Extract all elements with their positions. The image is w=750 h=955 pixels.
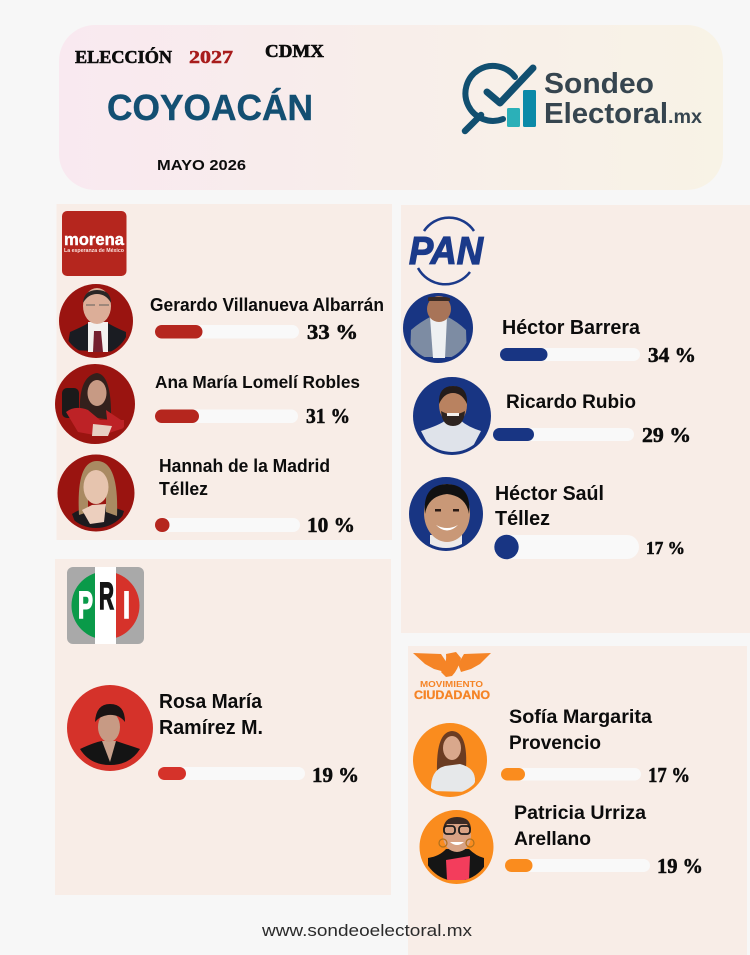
candidate: Héctor Barrera: 34 % [648, 343, 696, 367]
candidate: Hannah de la Madrid Téllez: Hannah de la Madrid [159, 456, 330, 476]
logo: pri: I [123, 585, 130, 627]
candidate: Patricia Urriza Arellano [420, 802, 703, 884]
candidate: Hannah de la Madrid Téllez: Téllez [159, 479, 208, 499]
heading: elección: ELECCIÓN [75, 46, 172, 67]
candidate: Héctor Saúl Téllez: Téllez [495, 508, 550, 530]
candidate: Gerardo Villanueva Albarrán [59, 284, 384, 358]
candidate: Ana María Lomelí Robles [55, 364, 360, 444]
candidate: Rosa María Ramírez M.: Rosa María [159, 691, 263, 713]
logo: pri: R [99, 576, 114, 618]
candidate: Ricardo Rubio: 29 % [642, 423, 691, 447]
candidate: Sofía Margarita Provencio: Sofía Margarita [509, 706, 652, 728]
candidate: Héctor Barrera [403, 293, 696, 367]
logo: morena [62, 211, 126, 276]
candidate: Ana María Lomelí Robles: Ana María Lomelí Robles [155, 372, 360, 392]
panel: pan [401, 205, 750, 633]
candidate: Sofía Margarita Provencio: Provencio [509, 732, 601, 754]
title: coyoacán: COYOACÁN [107, 87, 313, 128]
logo: pan: PAN [409, 230, 484, 273]
candidate: Rosa María Ramírez M.: Ramírez M. [159, 717, 263, 739]
candidate: Héctor Saúl Téllez: 17 % [646, 538, 685, 558]
panel: movimiento ciudadano [408, 646, 747, 955]
candidate: Sofía Margarita Provencio [413, 706, 690, 797]
logo: movimiento ciudadano: MOVIMIENTO [420, 679, 483, 689]
panel: pri [55, 559, 391, 895]
candidate: Gerardo Villanueva Albarrán: 33 % [307, 320, 358, 344]
logo: morena: morena [64, 230, 125, 249]
logo: sondeo electoral: Sondeo [544, 68, 654, 100]
candidate: Ricardo Rubio [413, 377, 691, 455]
candidate: Ana María Lomelí Robles: 31 % [306, 404, 350, 428]
heading: cdmx: CDMX [265, 41, 324, 61]
panel: morena [55, 204, 392, 540]
candidate: Héctor Saúl Téllez: Héctor Saúl [495, 483, 604, 505]
candidate: Héctor Barrera: Héctor Barrera [502, 317, 641, 339]
logo: sondeo electoral: .mx [668, 107, 702, 128]
heading: year: 2027 [189, 47, 233, 67]
candidate: Ricardo Rubio: Ricardo Rubio [506, 391, 636, 413]
logo: sondeo electoral [465, 66, 702, 131]
candidate: Rosa María Ramírez M.: 19 % [312, 763, 359, 787]
candidate: Héctor Saúl Téllez [409, 477, 685, 559]
candidate: Patricia Urriza Arellano: Arellano [514, 828, 591, 850]
candidate: Patricia Urriza Arellano: Patricia Urriza [514, 802, 646, 824]
logo: movimiento ciudadano: CIUDADANO [414, 688, 490, 702]
candidate: Rosa María Ramírez M. [67, 685, 359, 787]
header panel [59, 25, 723, 190]
footer url: www.sondeoelectoral.mx [261, 921, 473, 940]
logo: pan [409, 218, 484, 284]
logo: pri: P [78, 585, 93, 627]
candidate: Patricia Urriza Arellano: 19 % [657, 854, 703, 878]
logo: pri [67, 567, 144, 644]
candidate: Sofía Margarita Provencio: 17 % [648, 763, 690, 787]
candidate: Hannah de la Madrid Téllez [58, 454, 355, 537]
logo: movimiento ciudadano [413, 652, 491, 702]
date: MAYO 2026 [157, 157, 246, 174]
candidate: Gerardo Villanueva Albarrán: Gerardo Villanueva Albarrán [150, 295, 384, 315]
logo: sondeo electoral: Electoral [544, 98, 668, 130]
logo: morena: La esperanza de México [64, 248, 125, 254]
candidate: Hannah de la Madrid Téllez: 10 % [307, 513, 355, 537]
